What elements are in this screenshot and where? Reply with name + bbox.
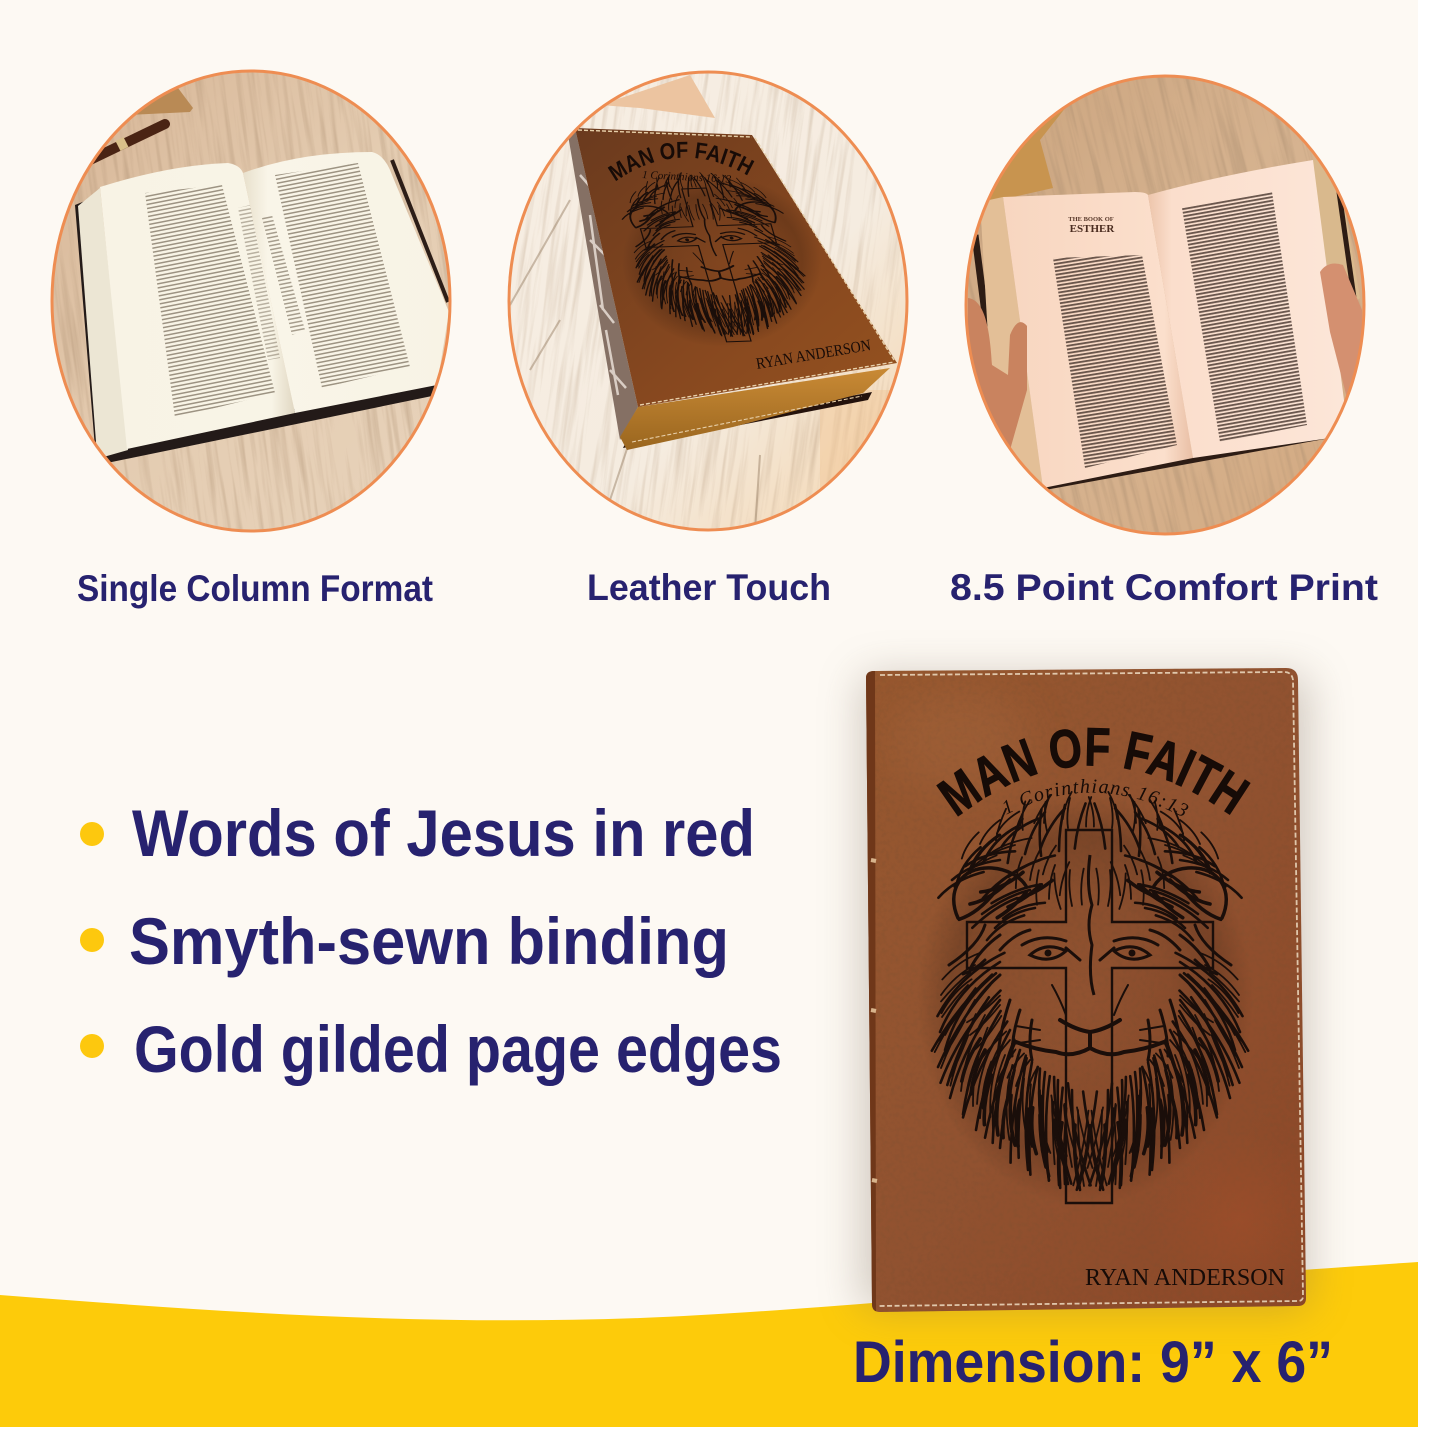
main leather bible cover: 1 Corinthians 16:13	[1004, 779, 1188, 816]
bullet: gold gilded	[80, 1034, 104, 1058]
cover verse	[1006, 793, 1188, 820]
feature list	[80, 796, 782, 1086]
photo: hands holding open bible	[964, 74, 1366, 536]
feature: gold gilded: Gold gilded page edges	[134, 1012, 782, 1086]
page heading: THE BOOK OF	[1068, 216, 1114, 223]
feature: smyth sewn: Smyth-sewn binding	[129, 904, 729, 978]
small cover name: RYAN ANDERSON	[755, 337, 872, 373]
caption: single column format: Single Column Format	[77, 568, 433, 609]
caption: comfort print: 8.5 Point Comfort Print	[950, 567, 1378, 608]
cover name: RYAN ANDERSON	[1085, 1265, 1285, 1291]
photo: leather cover on wood table	[508, 70, 908, 532]
main leather bible cover	[866, 668, 1306, 1312]
caption: leather touch: Leather Touch	[587, 567, 831, 608]
page heading large: ESTHER	[1070, 223, 1115, 235]
bullet: words of jesus	[80, 822, 104, 846]
book shadow	[862, 676, 1308, 1308]
small cover title	[615, 158, 750, 182]
cover title	[956, 765, 1226, 818]
yellow wave footer	[0, 1262, 1418, 1427]
main leather bible cover: MAN OF FAITH	[936, 728, 1251, 816]
photo: leather cover on wood table: MAN OF FAITH	[608, 142, 754, 181]
feature: words of jesus: Words of Jesus in red	[132, 796, 755, 870]
dimension label: Dimension: 9” x 6”	[853, 1330, 1333, 1395]
small cover verse: 1 Corinthians 16:13	[642, 169, 732, 186]
photo: open bible single column	[50, 70, 452, 532]
bullet: smyth sewn	[80, 928, 104, 952]
